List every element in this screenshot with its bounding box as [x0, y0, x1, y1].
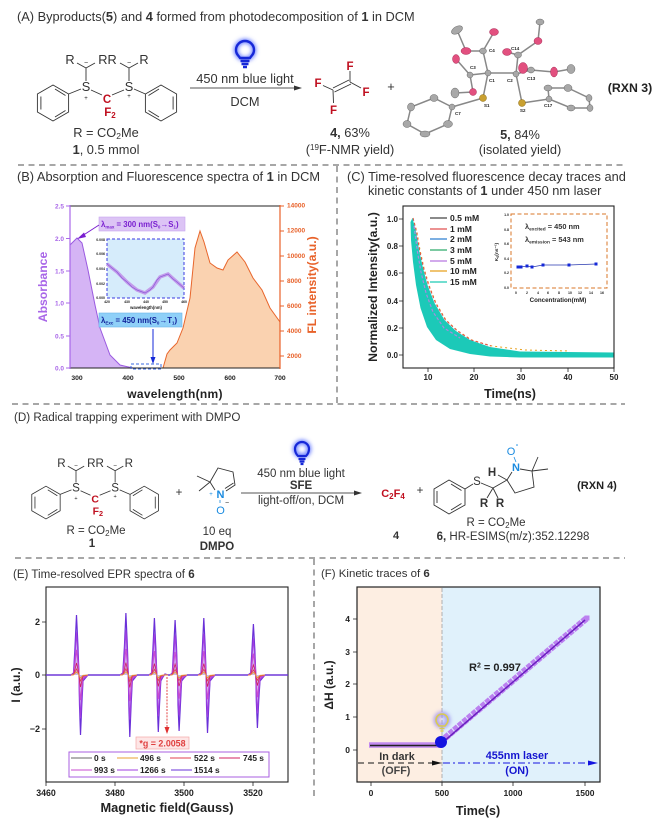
- chart: absorption and fluorescence: 400: [122, 375, 134, 382]
- chart: decay traces: [366, 206, 619, 401]
- chart: decay traces: Time(ns): [484, 387, 536, 401]
- inset: kinetic constants: [494, 213, 607, 304]
- chart: kinetic trace: R: [469, 662, 477, 674]
- chart: absorption and fluorescence: 6000: [287, 303, 302, 310]
- structure: compound 1: −: [84, 60, 88, 67]
- structure: compound 1: 2: [99, 509, 103, 518]
- inset: kinetic constants: 14: [589, 291, 593, 295]
- structure: compound 1: −: [127, 60, 131, 67]
- callout: lambda excitation: λ: [101, 316, 105, 325]
- structure: radical adduct 6: 6, HR-ESIMS(m/z):352.12298: [437, 531, 589, 543]
- structure: compound 1: S: [72, 482, 80, 495]
- chart: EPR traces: 3460: [36, 788, 56, 798]
- chart: absorption and fluorescence: 1.5: [55, 268, 64, 276]
- structure: compound 1: [32, 457, 158, 550]
- inset: absorption zoom: 0.002: [96, 282, 105, 286]
- inset: absorption zoom: wavelength(nm): [129, 305, 163, 310]
- chart: EPR traces: I (a.u.): [9, 667, 23, 703]
- crystal structure of 5: [403, 19, 593, 157]
- legend: time points: 496 s: [140, 753, 161, 763]
- chart: absorption and fluorescence: 500: [173, 375, 185, 382]
- structure: tetrafluoroethylene 4: [306, 61, 394, 157]
- icon: blue light bulb: [236, 41, 254, 67]
- reaction label RXN 4: (RXN 4): [577, 480, 617, 492]
- heading: panel D: (D) Radical trapping experiment with DMPO: [14, 411, 240, 424]
- annotation: in dark off: [358, 751, 442, 777]
- legend: concentrations: 2 mM: [450, 234, 472, 244]
- chart: EPR traces: 3500: [174, 788, 194, 798]
- structure: compound 1: S: [82, 79, 90, 94]
- inset: kinetic constants: (ns⁻¹): [494, 242, 500, 256]
- structure: tetrafluoroethylene 4: F: [330, 105, 337, 117]
- inset: kinetic constants: Concentration(mM): [530, 297, 586, 304]
- callout: lambda excitation: ): [175, 316, 178, 325]
- callout: g value: *g = 2.0058: [139, 738, 186, 748]
- legend: concentrations: 5 mM: [450, 256, 472, 266]
- chart: kinetic trace: 2: [345, 679, 350, 689]
- inset: kinetic constants: λ: [525, 222, 529, 231]
- chart: decay traces: 1.0: [387, 215, 399, 224]
- chart: kinetic trace: [322, 587, 600, 818]
- heading: panel B: (B) Absorption and Fluorescence spectra of 1 in DCM: [17, 169, 320, 184]
- structure: compound 1: 1: [89, 538, 96, 550]
- inset: absorption zoom: 0.008: [96, 238, 105, 242]
- structure: compound 1: R: [57, 457, 66, 470]
- marker: light on point: [435, 736, 447, 748]
- heading: panel E: (E) Time-resolved EPR spectra of 6: [13, 569, 195, 581]
- structure: DMPO: O: [216, 505, 225, 517]
- chart: absorption and fluorescence: FL intensity(a.u.): [305, 236, 319, 334]
- reaction arrow with conditions: light-off/on, DCM: [258, 495, 344, 507]
- panel: D radical trapping: [14, 411, 617, 553]
- inset: kinetic constants: 8: [558, 291, 560, 295]
- callout: lambda max: 0: [158, 224, 161, 230]
- heading: panel C: [347, 169, 626, 198]
- chart: absorption and fluorescence: 600: [224, 375, 236, 382]
- chart: absorption and fluorescence: 8000: [287, 278, 302, 285]
- chart: absorption and fluorescence: 700: [274, 375, 286, 382]
- structure: radical adduct 6: R = CO: [466, 517, 505, 529]
- callout: lambda excitation: [99, 313, 182, 369]
- structure: DMPO: DMPO: [200, 541, 234, 553]
- structure: DMPO: +: [209, 492, 213, 498]
- panel: A photodecomposition reaction: [17, 9, 652, 157]
- inset: kinetic constants: 0.4: [504, 257, 509, 261]
- chart: absorption and fluorescence: 14000: [287, 202, 305, 210]
- chart: absorption and fluorescence: 2000: [287, 353, 302, 360]
- panel: F kinetic traces: [321, 568, 600, 818]
- structure: DMPO: N: [217, 489, 225, 501]
- inset: kinetic constants: 0.2: [504, 271, 509, 275]
- inset: absorption zoom: 0.006: [96, 252, 105, 256]
- structure: compound 1: Me: [110, 525, 126, 537]
- chart: kinetic trace: 0: [345, 745, 350, 755]
- inset: kinetic constants: 0.6: [504, 242, 509, 246]
- crystal structure of 5: S1: [484, 103, 490, 108]
- inset: absorption zoom: 440: [143, 300, 149, 304]
- product 4: F: [394, 488, 401, 500]
- chart: decay traces: 0.2: [387, 324, 399, 333]
- plus sign: +: [387, 79, 395, 94]
- callout: lambda max: λ: [101, 220, 105, 229]
- inset: absorption zoom: 450: [162, 300, 168, 304]
- heading: panel C: (C) Time-resolved fluorescence decay traces and: [347, 169, 626, 184]
- structure: compound 1: R = CO: [66, 525, 105, 537]
- inset: absorption zoom: [96, 238, 187, 310]
- structure: compound 1: +: [74, 496, 78, 502]
- structure: compound 1: RR: [98, 52, 117, 67]
- inset: kinetic constants: 0: [515, 291, 517, 295]
- structure: radical adduct 6: 2: [505, 521, 510, 530]
- legend: time points: 993 s: [94, 765, 115, 775]
- chart: absorption and fluorescence: 10000: [287, 253, 305, 260]
- icon: blue light bulb: [295, 442, 309, 464]
- chart: EPR traces: 2: [35, 617, 40, 627]
- inset: kinetic constants: 12: [578, 291, 582, 295]
- chart: absorption and fluorescence: 0.0: [55, 366, 64, 372]
- structure: compound 1: +: [127, 94, 131, 100]
- reaction arrow with conditions: 450 nm blue light: [196, 71, 294, 86]
- structure: compound 1: S: [125, 79, 133, 94]
- product 4: 4: [393, 530, 400, 542]
- chart: kinetic trace: 2: [477, 662, 481, 670]
- structure: compound 1: R = CO: [73, 125, 116, 140]
- chart: EPR traces: Magnetic field(Gauss): [101, 800, 233, 815]
- chart: absorption and fluorescence: wavelength(nm): [126, 387, 223, 401]
- chart: kinetic trace: 500: [435, 788, 449, 798]
- structure: compound 1: F: [93, 506, 99, 517]
- inset: kinetic constants: 0.8: [504, 228, 509, 232]
- chart: EPR traces: 3520: [243, 788, 263, 798]
- structure: radical adduct 6: R: [480, 498, 489, 510]
- callout: lambda excitation: 0: [157, 320, 160, 326]
- reaction arrow with conditions: SFE: [290, 480, 313, 492]
- chart: absorption and fluorescence: 12000: [287, 228, 305, 234]
- plus sign: +: [176, 487, 183, 499]
- inset: kinetic constants: 4: [537, 291, 539, 295]
- callout: lambda max: 1: [173, 224, 176, 230]
- callout: g value: [136, 677, 189, 749]
- inset: kinetic constants: 1.0: [504, 213, 509, 217]
- structure: compound 1: −: [74, 463, 78, 470]
- structure: compound 1: Me: [121, 125, 139, 140]
- structure: radical adduct 6: R: [496, 498, 505, 510]
- chart: EPR traces: −2: [30, 724, 40, 734]
- structure: compound 1: +: [114, 494, 117, 500]
- chart: decay traces: Normalized Intensity(a.u.): [366, 212, 380, 362]
- structure: tetrafluoroethylene 4: F: [314, 78, 322, 90]
- panel: E EPR spectra: [9, 569, 288, 815]
- plus sign: +: [417, 485, 424, 497]
- structure: radical adduct 6: N: [512, 462, 520, 474]
- legend: time points: 0 s: [94, 753, 106, 763]
- panel: C fluorescence decay: [347, 169, 626, 401]
- structure: radical adduct 6: O: [507, 446, 516, 458]
- structure: DMPO: −: [225, 500, 229, 507]
- crystal structure of 5: C4: [489, 48, 495, 53]
- legend: concentrations: 15 mM: [450, 277, 477, 287]
- reaction label RXN 3: (RXN 3): [608, 81, 652, 95]
- structure: compound 1: 2: [105, 529, 110, 538]
- structure: tetrafluoroethylene 4: F-NMR yield): [319, 142, 394, 157]
- structure: compound 1: RR: [87, 457, 104, 470]
- structure: compound 1: S: [111, 482, 119, 495]
- inset: kinetic constants: = 543 nm: [550, 235, 584, 244]
- structure: tetrafluoroethylene 4: F: [362, 87, 370, 99]
- structure: radical adduct 6: H: [488, 467, 496, 479]
- inset: absorption zoom: 460: [181, 300, 187, 304]
- chart: absorption and fluorescence: 2.5: [55, 204, 64, 210]
- chart: decay traces: 0.0: [387, 351, 399, 360]
- callout: lambda max: ): [176, 220, 179, 229]
- legend: concentrations: 3 mM: [450, 245, 472, 255]
- crystal structure of 5: 5, 84%: [500, 127, 540, 142]
- callout: lambda excitation: Exc: [105, 320, 114, 326]
- structure: radical adduct 6: [434, 444, 589, 543]
- crystal structure of 5: (isolated yield): [479, 142, 561, 157]
- chart: kinetic trace: 1000: [504, 788, 523, 798]
- inset: kinetic constants: excited: [529, 226, 546, 232]
- legend: time points: 1266 s: [140, 765, 166, 775]
- structure: compound 1: R: [125, 457, 133, 470]
- chart: absorption and fluorescence: 4000: [287, 328, 302, 335]
- chart: EPR traces: [9, 587, 288, 815]
- legend: time points: 745 s: [243, 753, 264, 763]
- inset: absorption zoom: 430: [124, 300, 130, 304]
- heading: panel C: kinetic constants of 1 under 450 nm laser: [368, 183, 602, 198]
- reaction arrow with conditions: [190, 71, 302, 109]
- heading: panel A: (A) Byproducts(5) and 4 formed from photodecomposition of 1 in DCM: [17, 9, 415, 24]
- structure: compound 1: R: [65, 52, 75, 67]
- structure: tetrafluoroethylene 4: (: [306, 142, 310, 157]
- chart: kinetic trace: 3: [345, 647, 350, 657]
- legend: concentrations: 0.5 mM: [450, 213, 479, 223]
- annotation: in dark off: In dark: [379, 751, 416, 763]
- chart: absorption and fluorescence: 0.5: [55, 334, 64, 340]
- legend: time points: [69, 752, 269, 777]
- chart: EPR traces: 0: [35, 670, 40, 680]
- structure: compound 1: C: [91, 495, 99, 506]
- annotation: in dark off: (OFF): [382, 765, 411, 777]
- inset: kinetic constants: 10: [568, 291, 572, 295]
- reaction arrow with conditions: DCM: [230, 94, 260, 109]
- product 4: [381, 488, 405, 542]
- crystal structure of 5: C1: [489, 78, 495, 83]
- inset: absorption zoom: 0.004: [96, 267, 105, 271]
- crystal structure of 5: S2: [520, 108, 526, 113]
- inset: kinetic constants: = 450 nm: [546, 222, 580, 231]
- structure: tetrafluoroethylene 4: 19: [310, 143, 319, 152]
- crystal structure of 5: C7: [455, 111, 461, 116]
- inset: absorption zoom: 420: [104, 300, 110, 304]
- structure: tetrafluoroethylene 4: 4, 63%: [330, 125, 370, 140]
- structure: tetrafluoroethylene 4: F: [346, 61, 354, 73]
- inset: kinetic constants: 16: [600, 291, 604, 295]
- inset: kinetic constants: emission: [529, 240, 550, 246]
- product 4: 2: [389, 492, 394, 501]
- callout: lambda excitation: →T: [159, 316, 172, 325]
- structure: compound 1: 1, 0.5 mmol: [73, 142, 139, 157]
- chart: decay traces: 20: [470, 373, 479, 382]
- inset: kinetic constants: K: [495, 258, 500, 261]
- product 4: C: [381, 488, 389, 500]
- callout: lambda max: = 300 nm(S: [114, 220, 158, 229]
- callout: lambda excitation: = 450 nm(S: [113, 316, 157, 325]
- chart: kinetic trace: ΔH (a.u.): [322, 660, 336, 710]
- callout: lambda excitation: 1: [172, 320, 175, 326]
- product 4: 4: [400, 492, 405, 501]
- inset: kinetic constants: 2: [526, 291, 528, 295]
- callout: lambda max: →S: [160, 220, 173, 229]
- structure: compound 1: C: [103, 94, 111, 106]
- inset: kinetic constants: 0.0: [504, 286, 509, 290]
- chart: kinetic trace: 4: [345, 614, 350, 624]
- panel: B absorption and fluorescence spectra: [17, 169, 320, 401]
- chart: decay traces: 40: [564, 373, 573, 382]
- chart: absorption and fluorescence: 2.0: [55, 236, 64, 243]
- structure: compound 1: +: [84, 96, 88, 102]
- heading: panel F: (F) Kinetic traces of 6: [321, 568, 430, 580]
- crystal structure of 5: C13: [527, 76, 536, 81]
- crystal structure of 5: C2: [507, 78, 513, 83]
- chart: decay traces: 30: [517, 373, 526, 382]
- chart: absorption and fluorescence: 1.0: [55, 300, 64, 308]
- chart: kinetic trace: Time(s): [456, 804, 500, 818]
- chart: absorption and fluorescence: Absorbance: [36, 252, 50, 322]
- crystal structure of 5: C14: [511, 46, 520, 51]
- inset: kinetic constants: λ: [525, 235, 529, 244]
- reaction arrow with conditions: [241, 468, 362, 507]
- chart: decay traces: 0.8: [387, 242, 399, 251]
- legend: time points: 522 s: [194, 753, 215, 763]
- chart: decay traces: 0.4: [387, 297, 399, 306]
- chart: kinetic trace: 1: [345, 712, 350, 722]
- structure: radical adduct 6: S: [473, 476, 481, 488]
- annotation: laser on: (ON): [505, 765, 529, 777]
- structure: DMPO: 10 eq: [203, 526, 231, 538]
- chart: absorption and fluorescence: [36, 202, 319, 401]
- reaction arrow with conditions: 450 nm blue light: [257, 468, 346, 480]
- legend: concentrations: 10 mM: [450, 266, 477, 276]
- inset: absorption zoom: 0.000: [96, 296, 105, 300]
- structure: radical adduct 6: Me: [510, 517, 526, 529]
- inset: kinetic constants: 6: [547, 291, 549, 295]
- callout: lambda max: [77, 217, 185, 239]
- structure: compound 1: [37, 52, 177, 157]
- structure: compound 1: R: [139, 52, 149, 67]
- crystal structure of 5: C17: [544, 103, 553, 108]
- legend: time points: 1514 s: [194, 765, 220, 775]
- structure: compound 1: 2: [111, 111, 116, 120]
- structure: DMPO: [197, 468, 235, 553]
- structure: compound 1: F: [104, 107, 111, 119]
- chart: decay traces: 50: [610, 373, 619, 382]
- chart: kinetic trace: 1500: [576, 788, 595, 798]
- annotation: laser on: [443, 750, 598, 777]
- inset: kinetic constants: 0: [496, 256, 500, 258]
- chart: kinetic trace: = 0.997: [481, 662, 521, 674]
- icon: yellow light bulb: [436, 714, 448, 731]
- structure: compound 1: 2: [116, 131, 121, 141]
- chart: absorption and fluorescence: 300: [71, 375, 83, 382]
- chart: EPR traces: 3480: [105, 788, 125, 798]
- chart: kinetic trace: 0: [369, 788, 374, 798]
- callout: lambda max: max: [105, 224, 115, 230]
- chart: decay traces: 0.6: [387, 269, 399, 278]
- crystal structure of 5: C3: [470, 65, 476, 70]
- annotation: laser on: 455nm laser: [486, 750, 549, 762]
- legend: concentrations: [430, 213, 479, 287]
- legend: concentrations: 1 mM: [450, 224, 472, 234]
- structure: compound 1: −: [113, 463, 117, 470]
- chart: decay traces: 10: [424, 373, 433, 382]
